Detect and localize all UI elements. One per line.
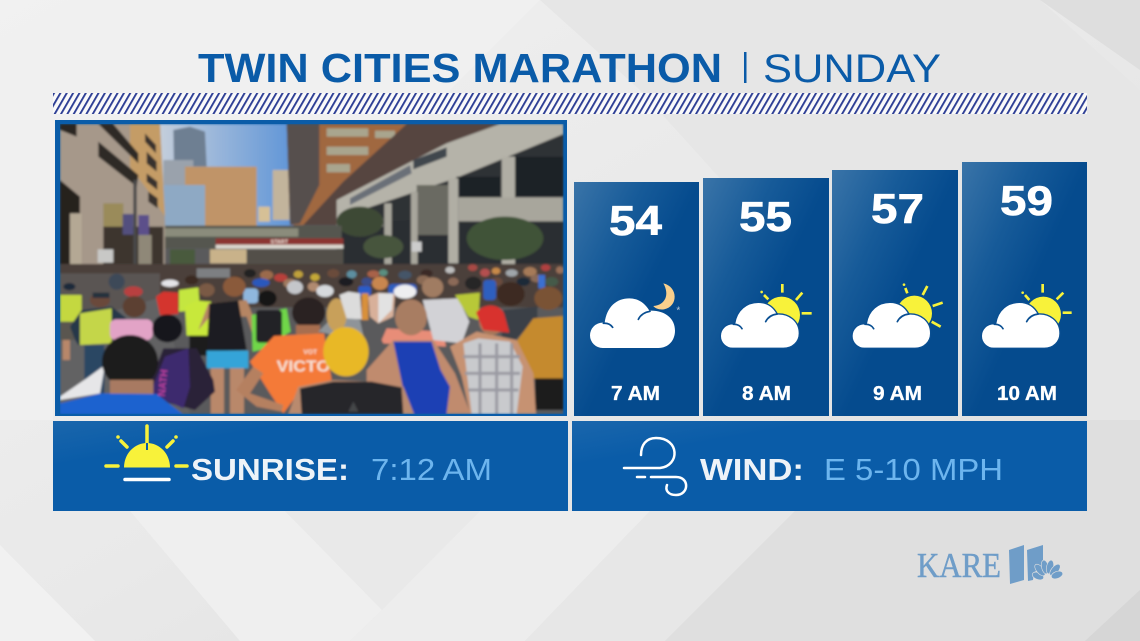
white tanks bbox=[339, 292, 362, 319]
panel: 9 AM forecast bbox=[832, 170, 958, 416]
icon: partly cloudy night bbox=[590, 283, 680, 348]
right building dark base bbox=[340, 219, 564, 266]
orange shirt runner bbox=[292, 297, 325, 328]
skybridge and start banner bbox=[165, 226, 342, 248]
panel: marathon start photo: VOT bbox=[303, 349, 317, 356]
temperature 54: 54 bbox=[609, 197, 663, 244]
distant towers bbox=[173, 127, 207, 167]
panel: marathon start photo: NATH bbox=[157, 369, 171, 397]
panel: marathon start photo bbox=[55, 120, 567, 416]
logo: KARE 11 bbox=[917, 545, 1064, 585]
brown band bbox=[303, 124, 500, 225]
logo: KARE 11: KARE bbox=[917, 546, 1001, 585]
mustard tee man bbox=[515, 316, 563, 388]
icon: sun behind cloud bbox=[720, 284, 812, 348]
neon tee bbox=[185, 301, 211, 336]
panel: 8 AM forecast bbox=[703, 178, 829, 416]
blue tank man bbox=[367, 340, 471, 414]
title bbox=[198, 45, 941, 91]
panel: 7 AM forecast bbox=[574, 182, 699, 416]
white stripe on road bbox=[60, 365, 105, 400]
bottom-left runner bbox=[102, 335, 158, 388]
icon: sun behind cloud bbox=[852, 283, 943, 348]
temperature 57: 57 bbox=[871, 185, 924, 232]
icon: wind bbox=[624, 438, 686, 495]
sunrise time: 7:12 AM bbox=[371, 452, 492, 487]
panel: 10 AM forecast bbox=[962, 162, 1087, 416]
left volunteers bbox=[60, 295, 82, 322]
title: SUNDAY bbox=[763, 47, 941, 91]
icon: sun behind cloud bbox=[981, 284, 1072, 348]
dark tee man bbox=[502, 307, 537, 342]
wind value: E 5-10 MPH bbox=[824, 452, 1003, 487]
yellow beanie runner bbox=[288, 380, 414, 414]
icon: sunrise bbox=[106, 426, 187, 480]
concrete band bbox=[337, 124, 563, 218]
street and far crowd bbox=[60, 264, 563, 307]
time label: 9 AM bbox=[873, 383, 922, 405]
time label: 10 AM bbox=[997, 383, 1057, 405]
left building bbox=[60, 124, 165, 277]
sunrise label: SUNRISE: bbox=[191, 452, 349, 487]
pink tee and white tee bbox=[382, 328, 446, 347]
purple vest runner bbox=[145, 348, 215, 410]
temperature 59: 59 bbox=[1000, 177, 1053, 224]
blonde head and grey tee bbox=[318, 313, 365, 343]
hatched divider band bbox=[53, 93, 1087, 114]
title: TWIN CITIES MARATHON bbox=[198, 45, 722, 91]
hi-vis vest right bbox=[455, 293, 480, 320]
wind label: WIND: bbox=[700, 452, 804, 487]
panel: wind bbox=[572, 421, 1087, 511]
panel: marathon start photo: VICTO bbox=[277, 359, 330, 376]
panel: marathon start photo: START bbox=[271, 240, 289, 246]
plaid tank man bbox=[450, 332, 536, 414]
temperature 55: 55 bbox=[739, 193, 792, 240]
time label: 7 AM bbox=[611, 383, 660, 405]
time label: 8 AM bbox=[742, 383, 791, 405]
brick tower bbox=[287, 124, 407, 225]
icon: partly cloudy night: * bbox=[676, 306, 680, 317]
panel: sunrise bbox=[53, 421, 568, 511]
